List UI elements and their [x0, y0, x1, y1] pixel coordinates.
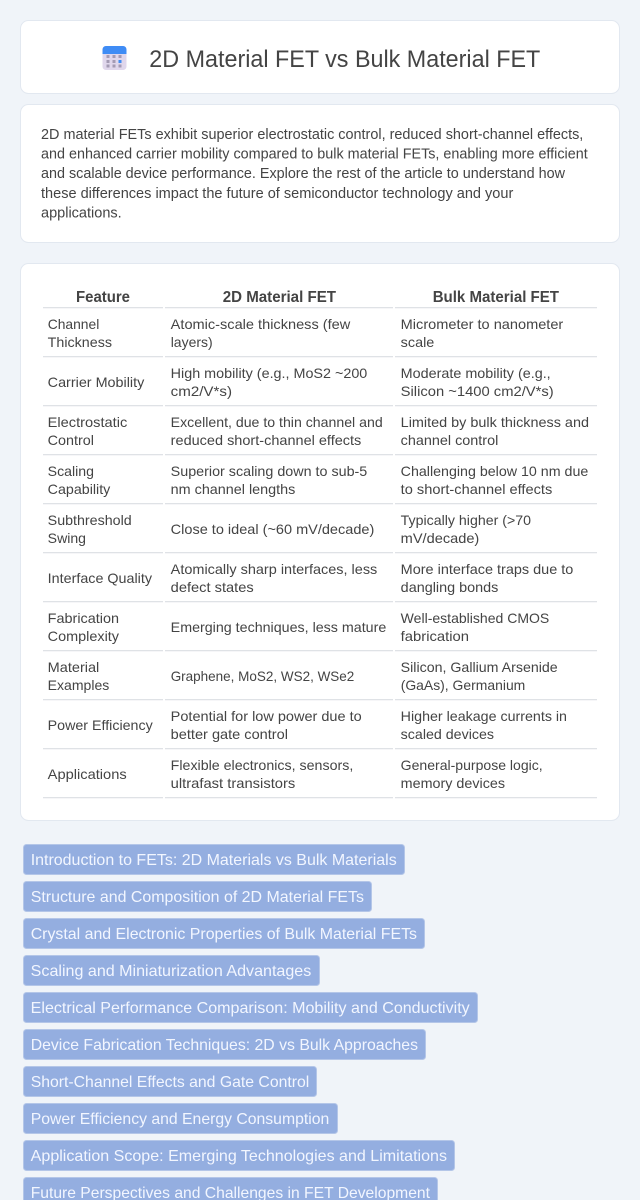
row: channel thickness: scale [401, 334, 435, 350]
row: power efficiency: Potential for low power due to [171, 708, 362, 724]
row: applications: ultrafast transistors [171, 775, 295, 791]
row: subthreshold swing: Subthreshold [48, 512, 132, 528]
topic link 4: Scaling and Miniaturization Advantages [31, 963, 311, 980]
row: subthreshold swing: Swing [48, 530, 86, 546]
topic link 2 [24, 882, 372, 912]
text block: summary: and scalable device performance. Explore the rest of the article to understand how [41, 166, 566, 182]
row: scaling capability: Superior scaling down to sub-5 [171, 463, 368, 479]
row: interface quality [43, 561, 597, 602]
topic link 7: Short-Channel Effects and Gate Control [31, 1074, 309, 1091]
table header: Feature [76, 289, 130, 306]
topic link 1: Introduction to FETs: 2D Materials vs Bulk Materials [31, 852, 397, 869]
topic link 9 [24, 1140, 454, 1170]
table header [43, 289, 597, 308]
topic link 1 [24, 844, 404, 874]
text block: summary: applications. [41, 205, 122, 221]
row: material examples: Silicon, Gallium Arsenide [401, 659, 558, 675]
row: fabrication complexity: Complexity [48, 628, 119, 644]
row: fabrication complexity: Emerging techniques, less mature [171, 619, 387, 635]
row: power efficiency [43, 708, 597, 749]
topic link 4 [24, 956, 320, 986]
text block: summary: 2D material FETs exhibit superior electrostatic control, reduced short-channel effects, [41, 127, 583, 143]
topic link 3 [24, 918, 424, 948]
panel: comparison table [20, 264, 620, 820]
topic link 3: Crystal and Electronic Properties of Bulk Material FETs [31, 926, 417, 943]
row: fabrication complexity [43, 610, 597, 651]
table header: 2D Material FET [223, 289, 336, 306]
row: electrostatic control: Electrostatic [48, 414, 127, 430]
row: electrostatic control: reduced short-channel effects [171, 432, 361, 448]
row: channel thickness [43, 316, 597, 357]
row: power efficiency: Power Efficiency [48, 717, 153, 733]
topic link 5: Electrical Performance Comparison: Mobility and Conductivity [31, 1000, 470, 1017]
row: interface quality: defect states [171, 579, 254, 595]
panel: intro paragraph [20, 104, 620, 242]
row: applications: memory devices [401, 775, 505, 791]
topic link 5 [24, 992, 478, 1022]
panel: title card [20, 20, 620, 94]
row: scaling capability: Challenging below 10 nm due [401, 463, 589, 479]
row: fabrication complexity: Fabrication [48, 610, 119, 626]
row: applications [43, 757, 597, 798]
row: scaling capability: to short-channel effects [401, 481, 552, 497]
row: applications: Flexible electronics, sensors, [171, 757, 353, 773]
row: scaling capability [43, 463, 597, 504]
row: interface quality: Atomically sharp interfaces, less [171, 561, 377, 577]
row: interface quality: Interface Quality [48, 570, 152, 586]
row: power efficiency: better gate control [171, 726, 288, 742]
row: interface quality: dangling bonds [401, 579, 498, 595]
row: scaling capability: nm channel lengths [171, 481, 295, 497]
text block: summary: these differences impact the future of semiconductor technology and your [41, 186, 514, 202]
topic link 6: Device Fabrication Techniques: 2D vs Bulk Approaches [31, 1037, 418, 1054]
row: material examples: (GaAs), Germanium [401, 677, 525, 693]
topic link 8: Power Efficiency and Energy Consumption [31, 1111, 329, 1128]
row: subthreshold swing [43, 512, 597, 553]
topic link 9: Application Scope: Emerging Technologies and Limitations [31, 1148, 447, 1165]
topic link 10 [24, 1178, 438, 1200]
row: carrier mobility: Carrier Mobility [48, 374, 144, 390]
row: carrier mobility: cm2/V*s) [171, 383, 232, 399]
row: electrostatic control [43, 414, 597, 455]
row: material examples: Examples [48, 677, 109, 693]
table header: Bulk Material FET [433, 289, 559, 306]
row: channel thickness: layers) [171, 334, 213, 350]
row: material examples [43, 659, 597, 700]
panel: topic links list [24, 844, 478, 1200]
row: carrier mobility: High mobility (e.g., MoS2 ~200 [171, 365, 368, 381]
text block: summary: and enhanced carrier mobility compared to bulk material FETs, enabling more efficient [41, 147, 588, 163]
row: channel thickness: Thickness [48, 334, 112, 350]
row: subthreshold swing: Close to ideal (~60 mV/decade) [171, 521, 374, 537]
row: scaling capability: Capability [48, 481, 110, 497]
topic link 2: Structure and Composition of 2D Material FETs [31, 889, 364, 906]
row: subthreshold swing: Typically higher (>70 [401, 512, 531, 528]
icon: calendar grid [102, 46, 126, 70]
row: interface quality: More interface traps due to [401, 561, 574, 577]
row: material examples: Graphene, MoS2, WS2, WSe2 [171, 668, 355, 684]
row: channel thickness: Channel [48, 316, 99, 332]
row: applications: General-purpose logic, [401, 757, 543, 773]
row: carrier mobility: Moderate mobility (e.g., [401, 365, 551, 381]
text block: summary [41, 127, 588, 221]
row: channel thickness: Micrometer to nanometer [401, 316, 564, 332]
topic link 8 [24, 1104, 338, 1134]
row: electrostatic control: Control [48, 432, 94, 448]
row: fabrication complexity: fabrication [401, 628, 469, 644]
row: scaling capability: Scaling [48, 463, 94, 479]
row: electrostatic control: channel control [401, 432, 498, 448]
topic link 7 [24, 1066, 316, 1096]
row: subthreshold swing: mV/decade) [401, 530, 479, 546]
row: power efficiency: scaled devices [401, 726, 494, 742]
row: applications: Applications [48, 766, 127, 782]
row: electrostatic control: Excellent, due to thin channel and [171, 414, 383, 430]
row: carrier mobility: Silicon ~1400 cm2/V*s) [401, 383, 554, 399]
row: electrostatic control: Limited by bulk thickness and [401, 414, 589, 430]
topic link 6 [24, 1030, 426, 1060]
row: material examples: Material [48, 659, 99, 675]
row: channel thickness: Atomic-scale thickness (few [171, 316, 351, 332]
title: 2D Material FET vs Bulk Material FET [149, 46, 541, 73]
row: fabrication complexity: Well-established CMOS [401, 610, 549, 626]
row: carrier mobility [43, 365, 597, 406]
row: power efficiency: Higher leakage currents in [401, 708, 567, 724]
